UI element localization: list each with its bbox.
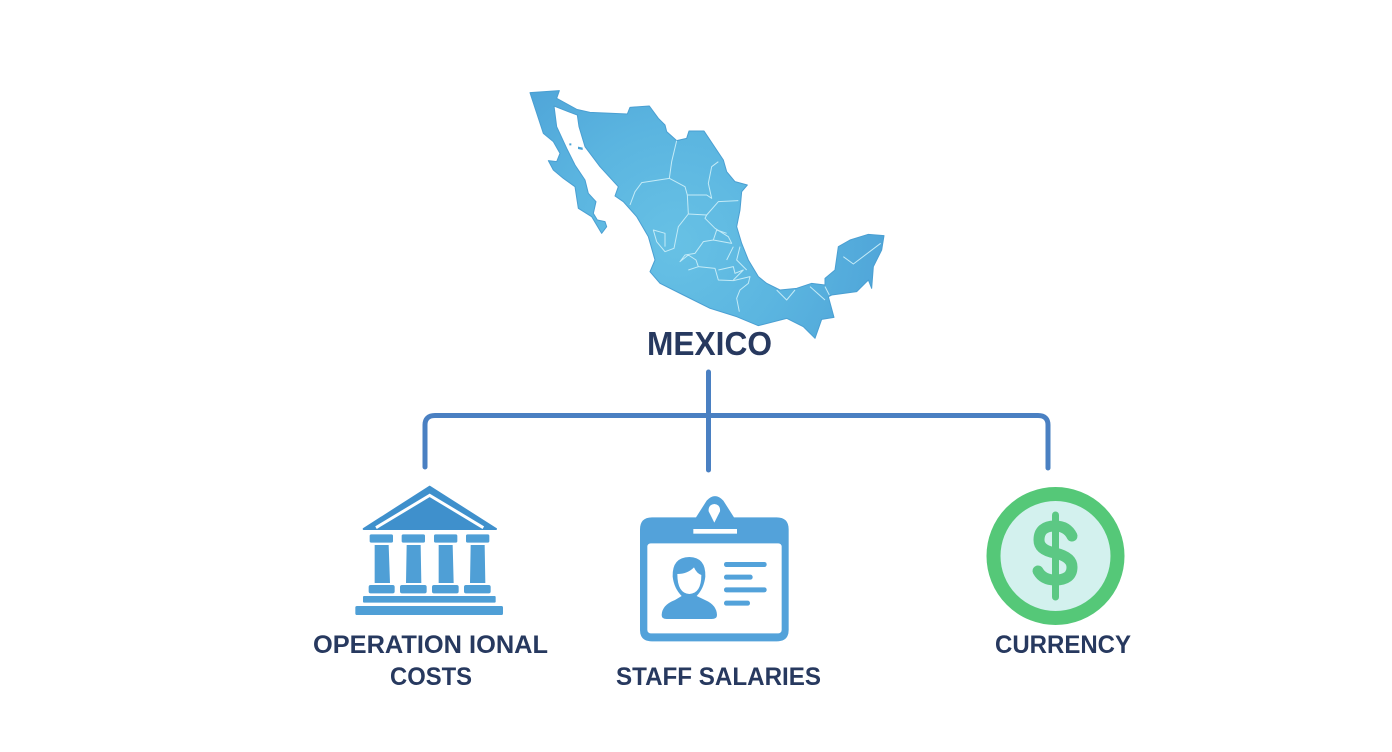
icon: currency coin (994, 494, 1118, 618)
label: operational costs: COSTS (390, 663, 472, 691)
label: operational costs (313, 631, 548, 691)
state borders (630, 141, 881, 312)
label: staff salaries: STAFF SALARIES (616, 663, 821, 691)
icon: bank building (355, 487, 503, 615)
icon: map of Mexico (530, 91, 884, 338)
heading: MEXICO: MEXICO (647, 325, 772, 362)
icon: staff ID badge (640, 496, 789, 641)
connector: tree lines (425, 372, 1048, 470)
label: currency: CURRENCY (995, 631, 1131, 659)
label: operational costs: OPERATION IONAL (313, 631, 548, 659)
